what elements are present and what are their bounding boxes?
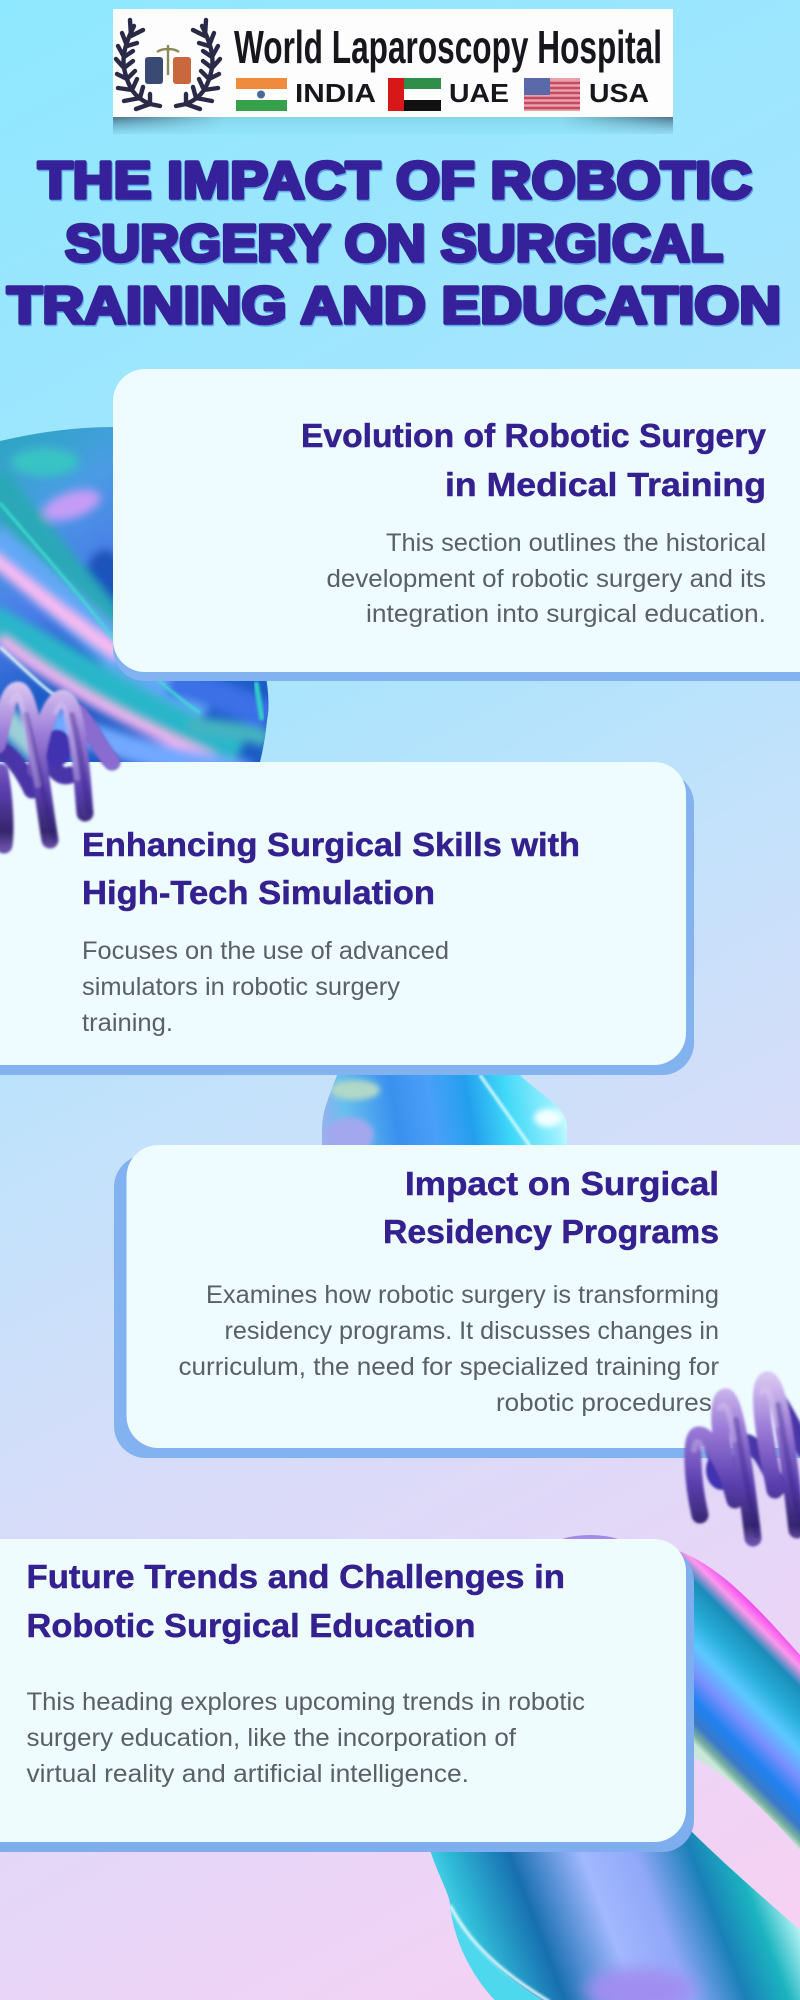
heading: Impact on Surgical xyxy=(405,1165,719,1202)
body text: surgery education, like the incorporation of xyxy=(26,1724,516,1752)
body text: robotic procedures. xyxy=(496,1389,719,1417)
heading xyxy=(82,826,580,911)
heading: in Medical Training xyxy=(445,466,766,503)
body text: development of robotic surgery and its xyxy=(326,565,766,593)
iridescent blob: centre xyxy=(322,1075,567,1145)
country: USA: USA xyxy=(589,78,649,108)
panel: Impact on Surgical Residency xyxy=(114,1145,800,1458)
panel: Enhancing Surgical Skills xyxy=(0,762,694,1075)
icon: flag of India xyxy=(236,78,287,111)
iridescent blob: upper left xyxy=(0,420,280,775)
body text xyxy=(82,937,449,1037)
title: TRAINING AND EDUCATION xyxy=(7,277,781,335)
spring decoration: upper left xyxy=(0,690,112,845)
title: SURGERY ON SURGICAL xyxy=(65,215,723,273)
heading xyxy=(26,1558,565,1644)
body text: virtual reality and artificial intelligence. xyxy=(26,1760,469,1788)
panel: Evolution of Robotic Surgery xyxy=(113,369,800,681)
logo banner xyxy=(113,9,673,134)
body text: curriculum, the need for specialized training for xyxy=(178,1353,719,1381)
icon: flag of USA xyxy=(524,78,580,111)
title xyxy=(7,152,781,335)
spring decoration: right xyxy=(693,1380,800,1538)
body text: This heading explores upcoming trends in robotic xyxy=(26,1688,585,1716)
icon: laurel wreath emblem xyxy=(116,20,220,109)
body text: Examines how robotic surgery is transforming xyxy=(206,1281,719,1309)
country: INDIA: INDIA xyxy=(295,78,376,108)
body text xyxy=(26,1688,585,1788)
heading: Evolution of Robotic Surgery xyxy=(301,417,767,454)
heading: Future Trends and Challenges in xyxy=(26,1558,565,1595)
body text: training. xyxy=(82,1009,173,1037)
body text xyxy=(326,529,766,628)
heading: Enhancing Surgical Skills with xyxy=(82,826,580,863)
body text: simulators in robotic surgery xyxy=(82,973,400,1001)
heading: Robotic Surgical Education xyxy=(26,1607,476,1644)
heading: High-Tech Simulation xyxy=(82,874,435,911)
title: THE IMPACT OF ROBOTIC xyxy=(38,152,752,210)
body text xyxy=(178,1281,719,1417)
heading: Residency Programs xyxy=(383,1213,719,1250)
country: UAE: UAE xyxy=(449,78,509,108)
iridescent blob: lower right xyxy=(425,1535,800,2000)
heading xyxy=(301,417,767,503)
icon: flag of UAE xyxy=(388,78,441,111)
panel: Future Trends and Challenges xyxy=(0,1539,694,1852)
heading xyxy=(383,1165,719,1250)
body text: Focuses on the use of advanced xyxy=(82,937,449,965)
body text: This section outlines the historical xyxy=(386,529,766,557)
body text: residency programs. It discusses changes in xyxy=(224,1317,719,1345)
body text: integration into surgical education. xyxy=(366,600,766,628)
